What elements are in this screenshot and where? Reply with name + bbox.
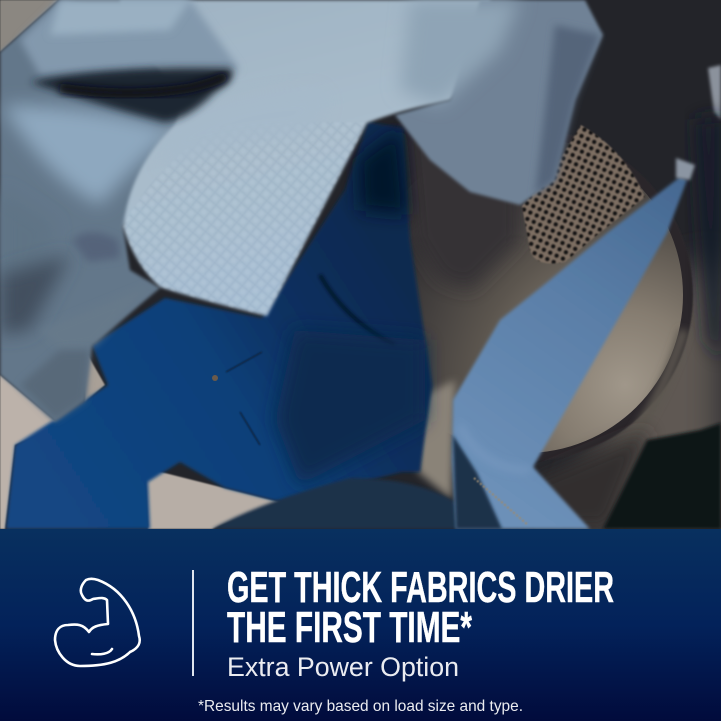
foreground denim cuff [452, 158, 695, 529]
navy jacket [6, 122, 432, 529]
heading [227, 563, 614, 652]
perforated drum filter [522, 125, 645, 264]
pale waffle-knit cloth [20, 0, 500, 316]
panel: navy caption band [0, 529, 721, 721]
foreground black garment, lower right [603, 423, 721, 529]
grey-blue knit cloth, left [0, 0, 178, 424]
icon: flexed bicep [55, 579, 140, 666]
subheading: Extra Power Option [227, 652, 459, 682]
pale floor of drum, lower left [0, 0, 280, 529]
footnote: *Results may vary based on load size and type. [198, 698, 523, 715]
dryer drum interior [0, 0, 721, 529]
blurred denim edge, right [708, 65, 721, 120]
dark denim at bottom centre [212, 478, 460, 529]
divider [192, 570, 194, 676]
right-hand fold of knit cloth [395, 0, 603, 205]
photo: clothes tumbling in dryer drum [0, 0, 721, 529]
heading: THE FIRST TIME* [227, 603, 473, 652]
